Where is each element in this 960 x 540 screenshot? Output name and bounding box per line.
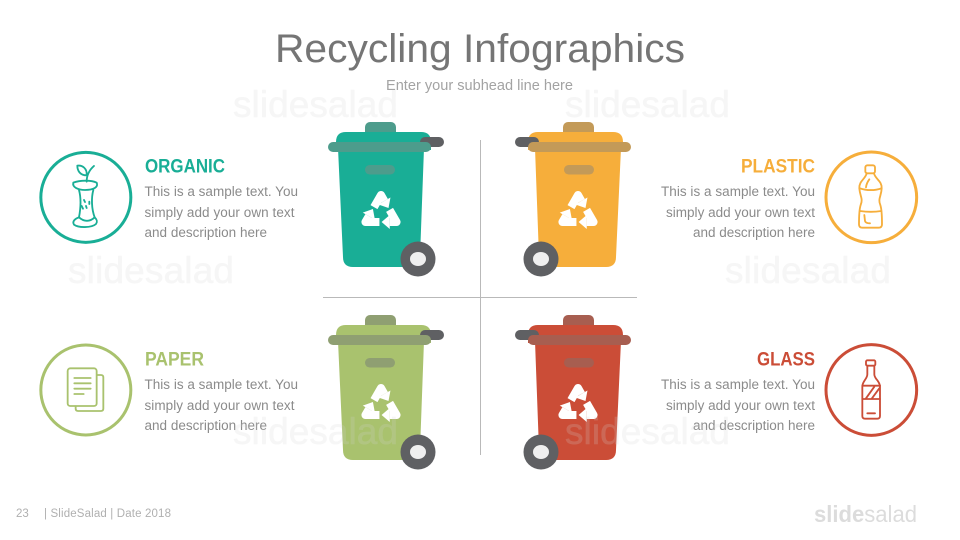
footer page number: 23 xyxy=(16,508,29,520)
heading: plastic: PLASTIC xyxy=(741,156,815,178)
description: glass: simply add your own text xyxy=(666,398,815,413)
subhead: Enter your subhead line here xyxy=(386,77,573,94)
description: paper: and description here xyxy=(144,418,267,433)
watermarks: slidesalad xyxy=(565,411,730,452)
bin: paper xyxy=(328,315,444,470)
watermarks: slidesalad xyxy=(565,84,730,125)
bin: glass xyxy=(515,315,631,470)
bin: plastic xyxy=(515,122,631,276)
description: glass xyxy=(661,377,815,433)
watermarks: slidesalad xyxy=(725,250,891,291)
vertical divider xyxy=(480,140,481,455)
footer text: | SlideSalad | Date 2018 xyxy=(44,508,171,520)
description: glass: This is a sample text. You xyxy=(661,377,815,392)
footer logo: slidesalad xyxy=(814,501,917,527)
description: paper xyxy=(144,377,298,433)
icon: plastic bottle xyxy=(826,152,917,243)
icon: paper sheets xyxy=(41,345,131,435)
panel: glass xyxy=(661,345,917,435)
description: glass: and description here xyxy=(693,418,815,433)
watermarks xyxy=(68,84,891,452)
title: Recycling Infographics xyxy=(275,27,685,71)
heading: glass: GLASS xyxy=(757,348,815,370)
panel: organic xyxy=(41,152,298,242)
description: organic: This is a sample text. You xyxy=(144,184,298,199)
heading: paper: PAPER xyxy=(145,348,204,370)
horizontal divider xyxy=(323,297,637,298)
description: paper: simply add your own text xyxy=(144,398,295,413)
watermarks: slidesalad xyxy=(233,411,398,452)
icon: apple core xyxy=(41,152,131,242)
description: plastic: simply add your own text xyxy=(666,205,815,220)
description: organic: simply add your own text xyxy=(144,205,295,220)
description: paper: This is a sample text. You xyxy=(144,377,298,392)
panel: plastic xyxy=(661,152,917,243)
description: plastic: and description here xyxy=(693,225,815,240)
icon: glass bottle xyxy=(826,345,917,435)
heading: organic: ORGANIC xyxy=(145,156,225,178)
description: organic xyxy=(144,184,298,240)
description: organic: and description here xyxy=(144,225,267,240)
description: plastic xyxy=(661,184,815,240)
description: plastic: This is a sample text. You xyxy=(661,184,815,199)
watermarks: slidesalad xyxy=(233,84,398,125)
panel: paper xyxy=(41,345,298,435)
watermarks: slidesalad xyxy=(68,250,234,291)
bin: organic xyxy=(328,122,444,276)
